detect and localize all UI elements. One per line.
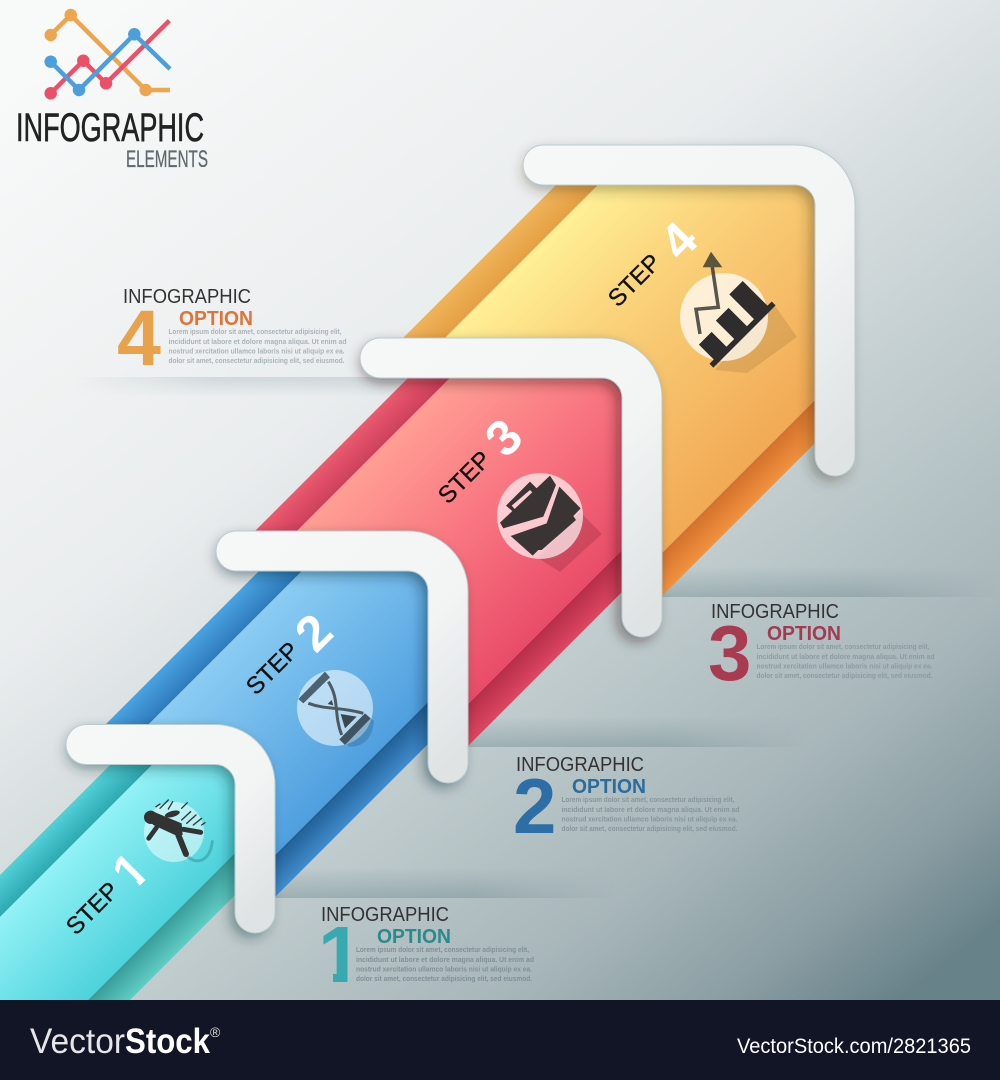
info block 3: INFOGRAPHIC: [711, 600, 839, 623]
info block 3: incididunt ut labore et dolore magna aliqua. Ut enim ad: [756, 652, 934, 661]
info block 4: nostrud xercitation ullamco laboris nisi ut aliquip ex ea.: [168, 346, 344, 356]
info block 1: 1: [318, 910, 362, 999]
info block 2: nostrud xercitation ullamco laboris nisi ut aliquip ex ea.: [562, 814, 738, 824]
step 2 label: STEP: [241, 637, 304, 700]
info block 1: Lorem ipsum dolor sit amet, consectetur adipisicing elit,: [356, 945, 529, 954]
step 2 label: 2: [284, 603, 343, 662]
info block 2: OPTION: [572, 776, 646, 798]
ribbon 4 orange: [383, 165, 835, 616]
info block 4: incididunt ut labore et dolore magna aliqua. Ut enim ad: [168, 337, 346, 346]
info block 4: Lorem ipsum dolor sit amet, consectetur adipisicing elit,: [168, 327, 342, 336]
icon: briefcase: [497, 473, 602, 572]
footer bar: Vector: [30, 1022, 125, 1061]
step 1 label: STEP: [61, 877, 124, 940]
info block 4: dolor sit amet, consectetur adipisicing elit, sed eiusmod.: [168, 356, 344, 365]
step 1 label: 1: [101, 841, 160, 900]
step 3 label: STEP: [433, 446, 496, 509]
info block 1: INFOGRAPHIC: [321, 903, 449, 926]
footer bar: ®: [210, 1024, 221, 1040]
info block 1: OPTION: [377, 926, 451, 948]
ribbon 2 blue: [86, 551, 448, 917]
info block 1: [322, 907, 534, 982]
info block 1: nostrud xercitation ullamco laboris nisi ut aliquip ex ea.: [356, 964, 532, 974]
info block 3: [708, 600, 934, 697]
info block 3: OPTION: [767, 623, 841, 645]
info block 4: [117, 285, 346, 382]
footer bar: VectorStock.com/2821365: [737, 1035, 971, 1058]
footer bar: Stock: [125, 1022, 210, 1061]
icon: hourglass: [297, 670, 374, 747]
step 4 label: [603, 211, 708, 312]
step 4 label: STEP: [603, 249, 666, 312]
info block 2: 2: [513, 762, 556, 850]
ribbon 1 cyan: [0, 744, 255, 1000]
info block 2: dolor sit amet, consectetur adipisicing elit, sed eiusmod.: [562, 824, 738, 833]
info block 2: [513, 753, 740, 850]
icon: falling man: [144, 800, 212, 862]
info block 2: INFOGRAPHIC: [516, 753, 644, 776]
ribbon 3 red: [235, 358, 642, 766]
info block 4: INFOGRAPHIC: [123, 285, 251, 308]
hook 4: [543, 165, 835, 461]
info block 4: OPTION: [179, 308, 253, 330]
info band shadows: [75, 377, 1000, 898]
title: INFOGRAPHIC: [16, 106, 204, 150]
footer bar: [0, 1000, 1000, 1080]
info block 2: Lorem ipsum dolor sit amet, consectetur adipisicing elit,: [562, 795, 734, 804]
hook 1: [86, 744, 255, 918]
step 2 label: [241, 603, 343, 700]
logo chart: [47, 11, 170, 97]
subtitle: ELEMENTS: [126, 146, 208, 173]
info block 3: nostrud xercitation ullamco laboris nisi ut aliquip ex ea.: [756, 662, 932, 670]
info block 3: 3: [708, 609, 751, 697]
info block 2: incididunt ut labore et dolore magna aliqua. Ut enim ad: [562, 805, 740, 814]
info block 1: incididunt ut labore et dolore magna aliqua. Ut enim ad: [356, 955, 534, 964]
step 3 label: [433, 408, 533, 509]
icon: rising chart: [680, 252, 797, 373]
hook 3: [380, 358, 642, 622]
info block 3: Lorem ipsum dolor sit amet, consectetur adipisicing elit,: [756, 642, 930, 651]
step 3 label: 3: [474, 408, 533, 467]
info block 3: dolor sit amet, consectetur adipisicing elit, sed eiusmod.: [756, 671, 932, 680]
info block 1: dolor sit amet, consectetur adipisicing elit, sed eiusmod.: [356, 974, 532, 983]
info block 4: 4: [117, 293, 161, 382]
step 1 label: [67, 856, 146, 934]
hook 2: [236, 551, 448, 768]
step 4 label: 4: [649, 211, 708, 270]
